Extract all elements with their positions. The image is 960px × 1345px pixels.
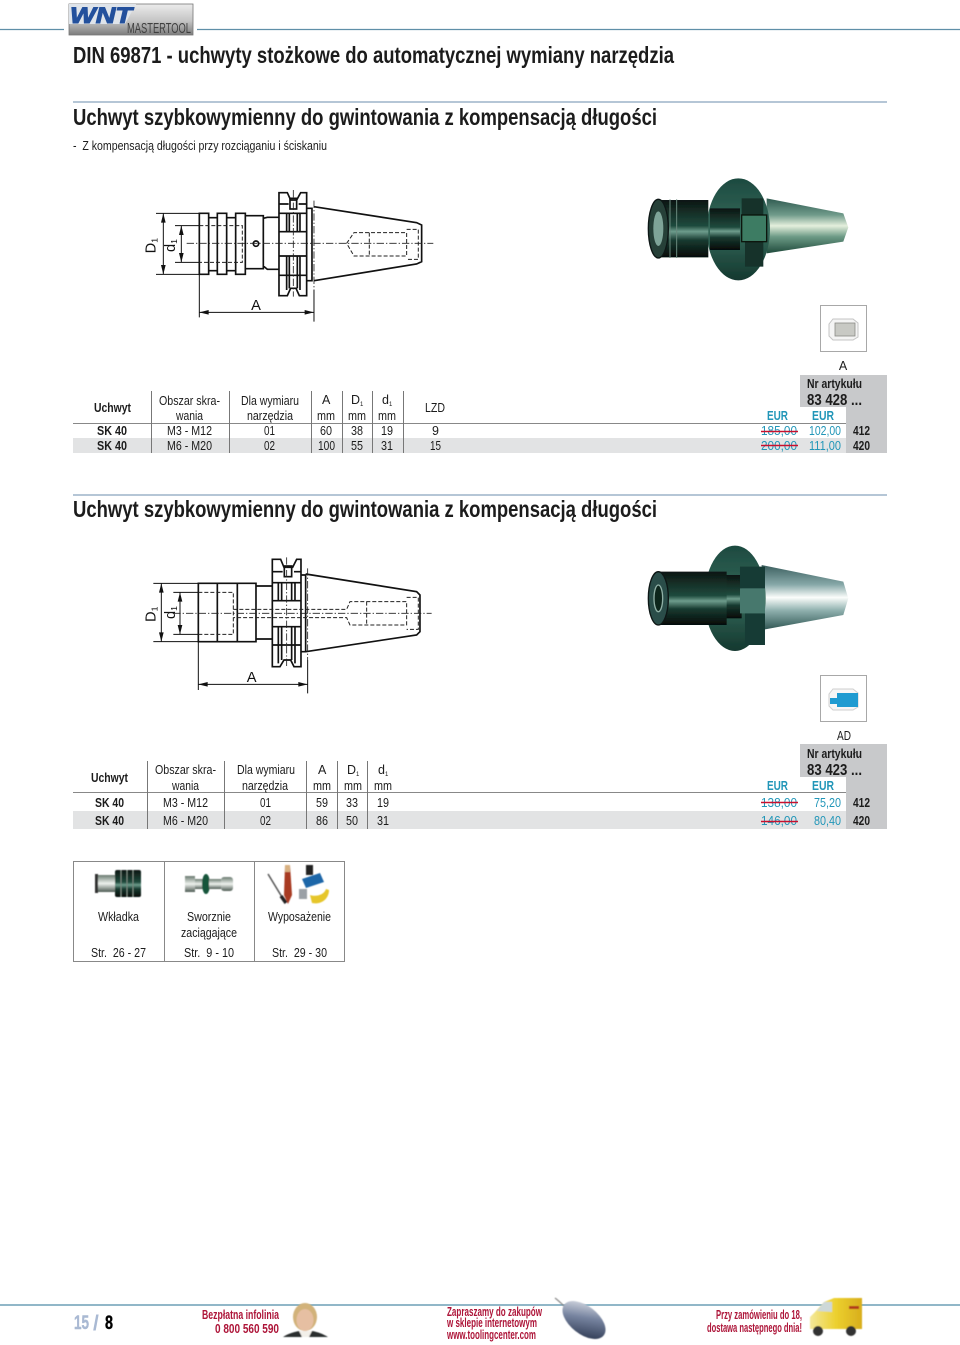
- technical drawing 1: 1: [149, 238, 159, 243]
- accessories panel: [74, 861, 344, 962]
- accessory labels: Wkładka: [98, 910, 139, 924]
- table 1 header: Obszar skra-: [159, 394, 220, 408]
- delivery text: [707, 1307, 802, 1335]
- table 2 rows: 33: [346, 796, 358, 810]
- table 1: [73, 375, 887, 453]
- page number: 8: [105, 1313, 113, 1334]
- logo: MASTERTOOL: [127, 20, 191, 37]
- table 1 rows: 19: [381, 424, 393, 438]
- table 1 header: mm: [378, 409, 396, 423]
- table 2 prices: 412: [853, 796, 870, 810]
- delivery text: Przy zamówieniu do 18,: [716, 1307, 802, 1322]
- icon: delivery van: [810, 1298, 862, 1336]
- table 1 prices: 200,00: [761, 439, 797, 453]
- table 2 header: A: [318, 763, 327, 777]
- table 1 rows: [97, 424, 441, 453]
- table 2 prices: 146,00: [761, 814, 797, 828]
- footer rule: [0, 1304, 960, 1306]
- table 1 rows: 01: [264, 424, 275, 438]
- accessory labels: Str. 26 - 27: [91, 946, 146, 960]
- table 1 prices: 83 428 ...: [807, 392, 862, 409]
- table 1 header: LZD: [425, 401, 445, 415]
- infoline text: Bezpłatna infolinia: [202, 1307, 280, 1322]
- technical drawing 2: 1: [169, 606, 179, 611]
- table 1 header: A: [322, 393, 331, 407]
- table 2 backgrounds: [73, 744, 887, 829]
- table 2 prices: Nr artykułu: [807, 747, 862, 761]
- table 2 header: Uchwyt: [91, 771, 129, 785]
- table 1 prices: 102,00: [809, 424, 841, 438]
- accessory labels: Sworznie: [187, 910, 231, 924]
- page title: DIN 69871 - uchwyty stożkowe do automatycznej wymiany narzędzia: [73, 42, 674, 68]
- table 1 header: 1: [360, 402, 364, 408]
- accessory labels: Wyposażenie: [268, 910, 331, 924]
- icon: pull stud: [185, 874, 233, 894]
- section 1 heading: Uchwyt szybkowymienny do gwintowania z kompensacją długości: [73, 104, 657, 130]
- icon: equipment: [268, 865, 329, 904]
- table 1 grid: [73, 391, 846, 453]
- table 1 backgrounds: [73, 375, 887, 453]
- table 1 prices: Nr artykułu: [807, 377, 862, 391]
- table 2 header: wania: [171, 779, 199, 793]
- technical drawing 2: d: [163, 611, 179, 619]
- table 2 header: [91, 763, 392, 793]
- technical drawing 1: 1: [169, 239, 179, 244]
- shop text: www.toolingcenter.com: [446, 1327, 536, 1342]
- table 2 rows: M3 - M12: [163, 796, 208, 810]
- table 1 rows: 02: [264, 439, 275, 453]
- table 2 rows: 02: [260, 814, 271, 828]
- table 2 rows: 59: [316, 796, 328, 810]
- accessory labels: [91, 910, 331, 960]
- panel frame: [74, 861, 344, 962]
- table 2 prices: 75,20: [814, 796, 841, 810]
- product photo 1: [648, 178, 848, 280]
- table 1 prices: 185,00: [761, 424, 797, 438]
- page number: [74, 1312, 113, 1335]
- shop text: w sklepie internetowym: [446, 1315, 537, 1330]
- shop text: [446, 1304, 543, 1342]
- icon: consultant: [283, 1303, 328, 1337]
- table 2 rows: 01: [260, 796, 271, 810]
- table 2 rows: SK 40: [95, 814, 124, 828]
- section 2 heading: Uchwyt szybkowymienny do gwintowania z kompensacją długości: [73, 496, 657, 522]
- table 1 prices: EUR: [812, 409, 834, 423]
- infoline text: [202, 1307, 280, 1336]
- table 1 header: Dla wymiaru: [241, 394, 299, 408]
- table 1 rows: SK 40: [97, 424, 127, 438]
- technical drawing 2: 1: [149, 606, 159, 611]
- shop text: Zapraszamy do zakupów: [447, 1304, 543, 1319]
- page number: 15: [74, 1313, 89, 1334]
- table 2 header: Dla wymiaru: [237, 763, 295, 777]
- table 1 prices: [761, 377, 870, 453]
- table 1 rows: SK 40: [97, 439, 127, 453]
- table 1 header: mm: [348, 409, 366, 423]
- table 1 rows: M3 - M12: [167, 424, 212, 438]
- table 1 header: mm: [317, 409, 335, 423]
- table 2 header: Obszar skra-: [155, 763, 216, 777]
- table 2 rows: 31: [377, 814, 389, 828]
- technical drawing 1: D: [143, 243, 159, 253]
- table 2 rows: 86: [316, 814, 328, 828]
- table 1 header: 1: [389, 402, 393, 408]
- table 1 header: narzędzia: [247, 409, 293, 423]
- technical drawing 2: [143, 557, 432, 693]
- accessory labels: zaciągające: [181, 926, 237, 940]
- table 2 grid: [73, 761, 846, 829]
- table 2 prices: 138,00: [761, 796, 797, 810]
- table 1 rows: 55: [351, 439, 363, 453]
- product photo 2: [648, 546, 848, 651]
- table 1 header: Uchwyt: [94, 401, 132, 415]
- table 2 header: narzędzia: [242, 779, 288, 793]
- table 2 header: D: [347, 763, 356, 777]
- technical drawing 1: A: [251, 298, 261, 314]
- table 1 rows: 15: [430, 439, 441, 453]
- table 2 header: 1: [385, 772, 389, 778]
- table 2 prices: 80,40: [814, 814, 841, 828]
- page number: /: [93, 1312, 99, 1335]
- delivery text: dostawa następnego dnia!: [707, 1320, 802, 1335]
- icon: insert: [95, 870, 141, 897]
- table 2 header: d: [378, 763, 385, 777]
- section 1 note: - Z kompensacją długości przy rozciąganiu i ściskaniu: [73, 138, 327, 153]
- mount icon A: [820, 306, 866, 352]
- table 1 rows: 60: [320, 424, 332, 438]
- table 2 header: mm: [344, 779, 362, 793]
- table 2 rows: 19: [377, 796, 389, 810]
- table 1 prices: 412: [853, 424, 870, 438]
- mount icon AD: [820, 676, 866, 722]
- table 2 prices: [761, 747, 870, 828]
- table 1 rows: 31: [381, 439, 393, 453]
- table 2: [73, 744, 887, 829]
- table 2 prices: EUR: [767, 779, 788, 793]
- table 2 rows: SK 40: [95, 796, 124, 810]
- table 2 header: 1: [356, 772, 360, 778]
- mount label AD: AD: [837, 729, 851, 743]
- table 1 rows: M6 - M20: [167, 439, 212, 453]
- icon: computer mouse: [555, 1294, 612, 1345]
- technical drawing 1: d: [163, 244, 179, 252]
- logo: WNT: [70, 3, 134, 28]
- table 1 header: d: [382, 393, 389, 407]
- table 2 prices: 83 423 ...: [807, 762, 862, 779]
- table 1 prices: EUR: [767, 409, 788, 423]
- table 2 header: mm: [313, 779, 331, 793]
- table 1 header: [94, 393, 445, 423]
- table 1 prices: 111,00: [809, 439, 841, 453]
- accessory labels: Str. 29 - 30: [272, 946, 327, 960]
- infoline text: 0 800 560 590: [215, 1321, 279, 1336]
- accessory labels: Str. 9 - 10: [184, 946, 234, 960]
- logo: [69, 3, 193, 37]
- table 2 prices: 420: [853, 814, 870, 828]
- technical drawing 2: D: [143, 611, 159, 622]
- table 2 rows: 50: [346, 814, 358, 828]
- header rule: [0, 28, 960, 30]
- table 1 header: wania: [175, 409, 203, 423]
- table 2 header: mm: [374, 779, 392, 793]
- table 1 header: D: [351, 393, 360, 407]
- table 2 rows: [95, 796, 389, 828]
- mount label A: A: [839, 359, 848, 373]
- table 2 prices: EUR: [812, 779, 834, 793]
- table 1 rows: 100: [318, 439, 335, 453]
- technical drawing 2: A: [247, 670, 257, 686]
- table 1 prices: 420: [853, 439, 870, 453]
- technical drawing 1: [143, 190, 433, 322]
- table 1 rows: 38: [351, 424, 363, 438]
- table 1 rows: 9: [432, 424, 439, 438]
- table 2 rows: M6 - M20: [163, 814, 208, 828]
